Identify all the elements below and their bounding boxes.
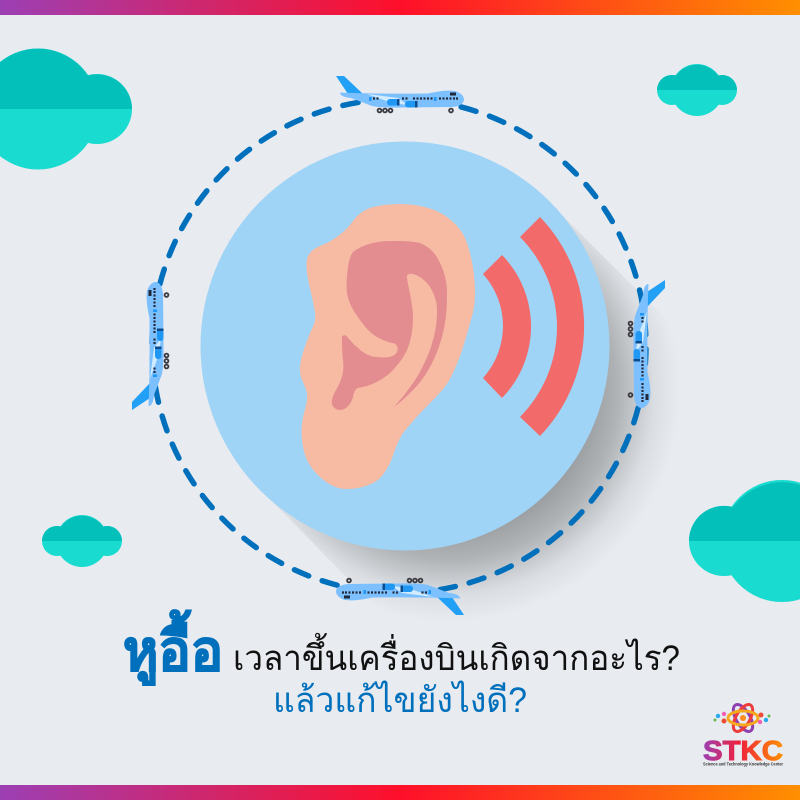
title keyword: หูอื้อ [123, 610, 223, 686]
cloud: top right [657, 64, 737, 116]
cloud: top left [0, 48, 132, 170]
icon: ear [300, 204, 475, 489]
logo: STKC [703, 702, 783, 766]
inner wave [483, 255, 531, 398]
cloud: bottom right [689, 480, 800, 602]
title line 1 [123, 610, 680, 686]
logo wordmark: STKC [703, 735, 783, 766]
dashed flight path [152, 99, 646, 593]
ear inner [332, 241, 447, 410]
plane: right [629, 280, 665, 408]
logo atom [714, 702, 770, 734]
outer wave [520, 217, 584, 436]
main blue circle [200, 142, 610, 550]
icon: sound waves [483, 217, 584, 436]
logo tagline: Science and Technology Knowledge Center [703, 762, 783, 766]
cloud: bottom left [42, 515, 122, 567]
plane: left [132, 282, 168, 410]
plane: top [336, 76, 464, 112]
bottom gradient bar [0, 785, 800, 800]
long shadow of circle [261, 202, 760, 703]
title question: เวลาขึ้นเครื่องบินเกิดจากอะไร? [233, 632, 680, 678]
plane: bottom [336, 579, 464, 615]
title line 2: แล้วแก้ไขยังไงดี? [273, 680, 527, 720]
top gradient bar [0, 0, 800, 15]
ear outer [300, 204, 475, 489]
